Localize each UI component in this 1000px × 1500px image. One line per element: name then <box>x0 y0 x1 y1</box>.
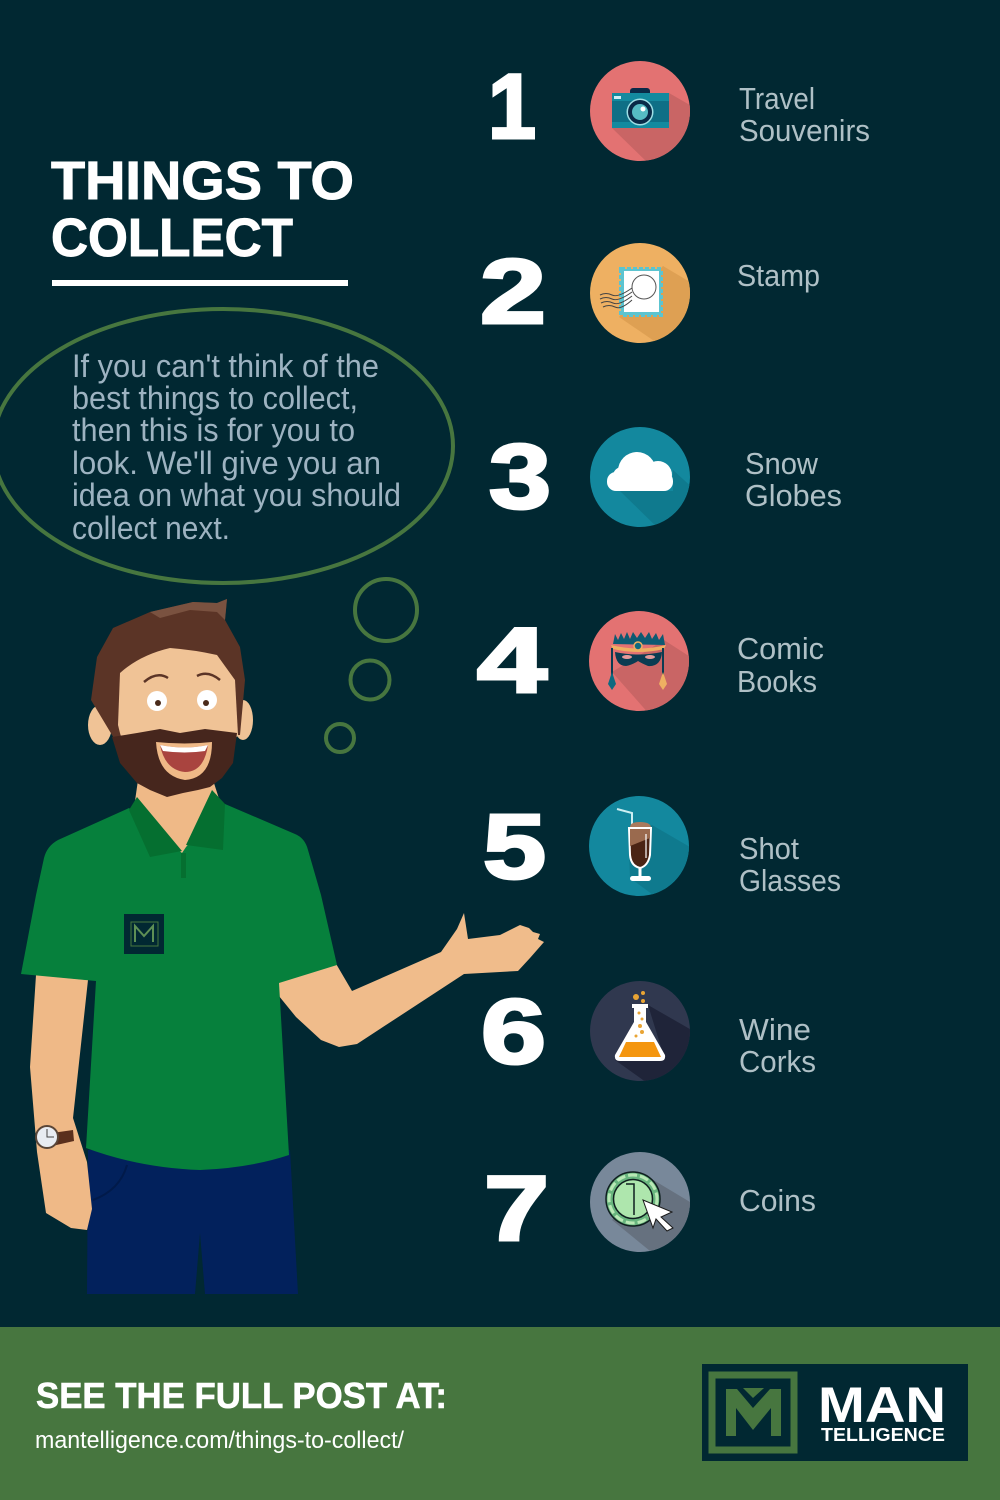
left arm with hand <box>30 975 92 1230</box>
bubble text <box>72 348 401 546</box>
number 2: 2 <box>480 241 546 343</box>
icon: stamp <box>590 243 695 345</box>
label: Globes <box>745 478 842 513</box>
icon: cloud <box>590 427 690 527</box>
label: Comic <box>737 631 824 666</box>
mouth <box>156 742 212 780</box>
label: Corks <box>739 1044 816 1079</box>
logo: MAN <box>818 1377 946 1433</box>
eyes <box>147 690 217 711</box>
title <box>51 151 354 268</box>
collar <box>129 790 225 878</box>
title: COLLECT <box>51 208 293 268</box>
label: Shot <box>739 831 799 866</box>
bubble text: collect next. <box>72 510 230 546</box>
bubble outline <box>0 309 453 583</box>
number 7: 7 <box>484 1158 549 1260</box>
neck <box>134 780 222 856</box>
footer band <box>0 1327 1000 1500</box>
icon: carnival mask <box>589 611 695 715</box>
label: Coins <box>739 1183 816 1218</box>
label: Stamp <box>737 258 820 293</box>
item 4 <box>477 610 824 715</box>
item 1 <box>488 56 870 165</box>
ears <box>88 700 253 745</box>
number 5: 5 <box>483 796 546 898</box>
hair highlight <box>150 599 227 620</box>
label: Travel <box>739 81 815 116</box>
footer heading: SEE THE FULL POST AT: <box>36 1375 447 1416</box>
watch <box>36 1126 74 1148</box>
bubble text: then this is for you to <box>72 412 355 448</box>
logo <box>702 1364 968 1461</box>
thought bubble <box>0 309 453 583</box>
label: Snow <box>745 446 819 481</box>
label: Souvenirs <box>739 113 870 148</box>
bubble text: best things to collect, <box>72 380 358 416</box>
hair <box>91 599 245 740</box>
label: Wine <box>739 1012 811 1047</box>
right arm with open hand <box>270 913 544 1047</box>
item 2 <box>480 241 820 345</box>
face <box>118 648 238 790</box>
number 1: 1 <box>488 56 536 158</box>
bubble text: look. We'll give you an <box>72 445 381 481</box>
logo: TELLIGENCE <box>821 1425 945 1445</box>
eyebrows <box>144 674 220 682</box>
trousers <box>87 1150 298 1294</box>
icon: camera <box>590 61 695 165</box>
icon: milkshake glass <box>589 796 695 900</box>
polo shirt <box>21 804 337 1170</box>
item 3 <box>489 426 842 535</box>
label <box>737 631 824 699</box>
icon: flask <box>590 981 695 1085</box>
label: Books <box>737 664 817 699</box>
thought dots <box>326 579 417 752</box>
label <box>745 446 842 513</box>
item 5 <box>483 796 841 900</box>
title underline <box>52 280 348 286</box>
icon: coin and cursor <box>590 1152 695 1255</box>
beard <box>112 729 237 797</box>
number 6: 6 <box>481 981 546 1083</box>
bubble text: If you can't think of the <box>72 348 379 384</box>
character: man in green polo <box>21 599 544 1294</box>
footer url: mantelligence.com/things-to-collect/ <box>35 1427 404 1454</box>
shirt badge <box>124 914 164 954</box>
number 3: 3 <box>489 426 551 528</box>
bubble text: idea on what you should <box>72 477 401 513</box>
title: THINGS TO <box>51 151 354 211</box>
label: Glasses <box>739 863 841 898</box>
number 4: 4 <box>477 610 547 712</box>
item 7 <box>484 1152 816 1260</box>
item 6 <box>481 981 816 1085</box>
label <box>739 831 841 898</box>
label <box>739 81 870 148</box>
label <box>739 1012 816 1079</box>
